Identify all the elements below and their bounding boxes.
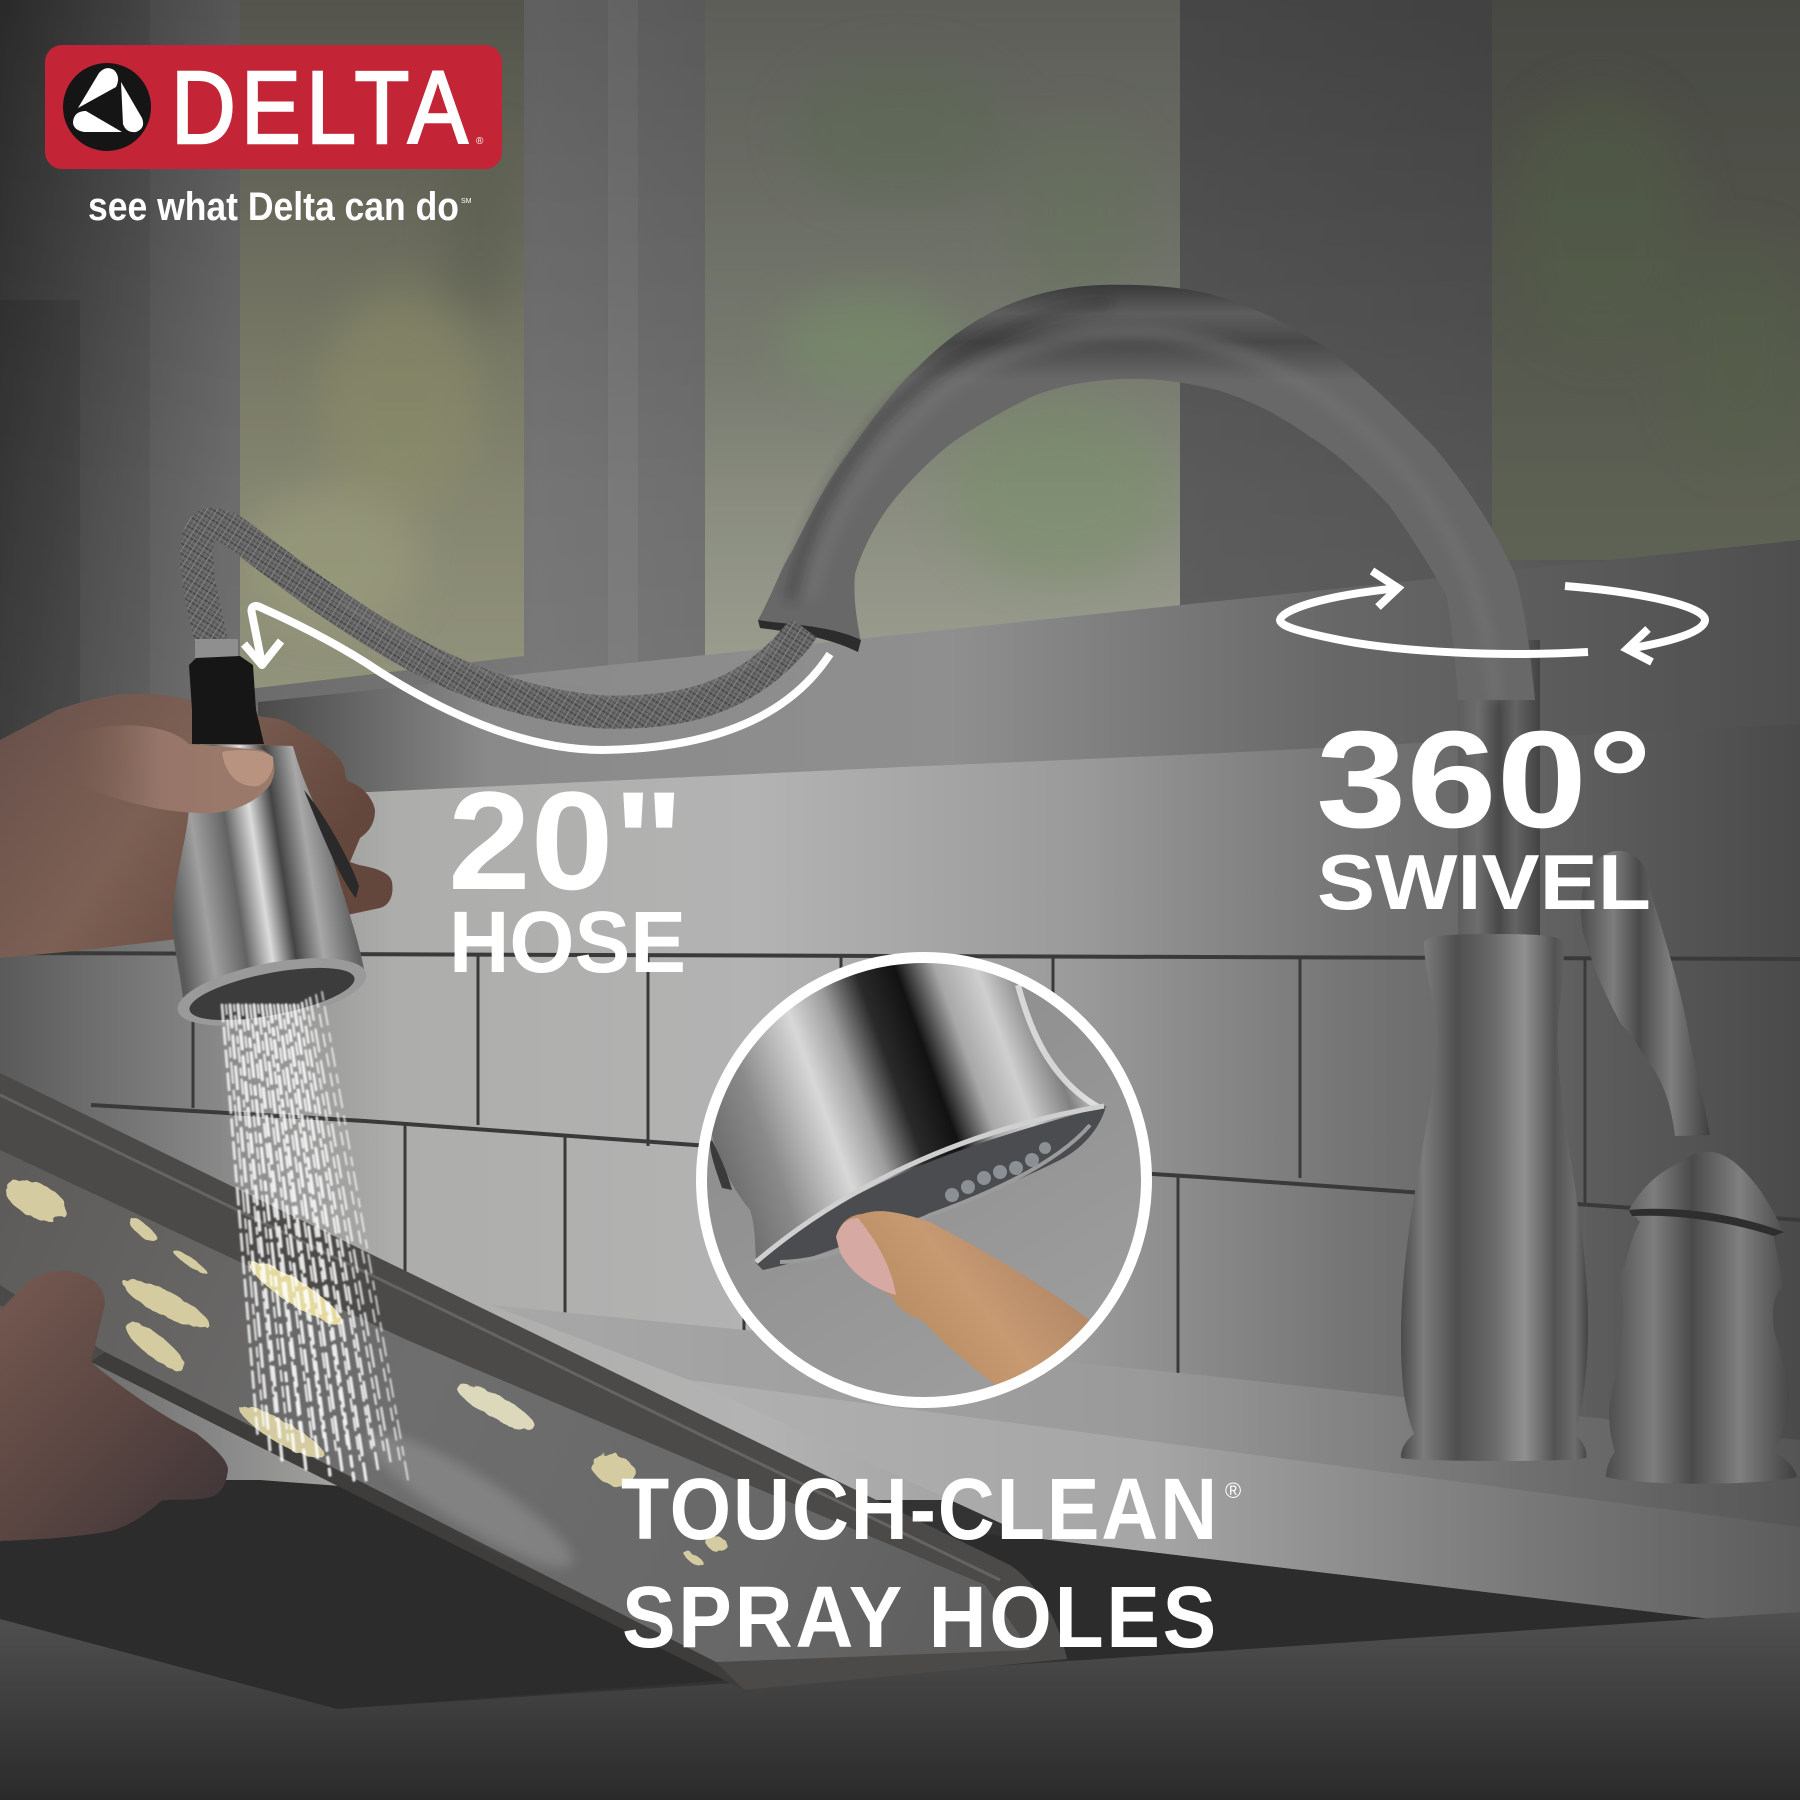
nozzle rim <box>172 945 372 1039</box>
pull-down hose <box>197 524 804 712</box>
countertop <box>491 1305 1800 1620</box>
tagline: see what Delta can do <box>88 185 459 229</box>
wet spray patch on tray <box>354 1414 586 1586</box>
touch-clean spray holes label <box>621 1461 1241 1666</box>
registered mark: ® <box>1225 1478 1241 1503</box>
circle outline <box>702 958 1146 1402</box>
lower hand holding tray <box>0 1270 228 1541</box>
arrow: hose length <box>244 606 830 750</box>
red badge <box>45 45 502 169</box>
chrome rim <box>756 1106 1104 1262</box>
upper wall and window frame <box>0 0 1800 800</box>
tray side wall highlight <box>0 1095 1000 1580</box>
nozzle underside <box>756 1106 1106 1270</box>
baking tray <box>0 1073 1067 1690</box>
tray outer shell <box>0 1073 1067 1690</box>
black neck <box>189 656 264 744</box>
window panes with foliage <box>240 0 1800 700</box>
tray flat base <box>0 1150 1030 1662</box>
20 inch hose label: HOSE <box>449 894 686 991</box>
chrome collar <box>195 639 238 659</box>
lower wall <box>0 724 1800 1500</box>
sprayer body <box>172 744 365 1006</box>
20 inch hose label <box>448 762 686 991</box>
thumb <box>70 725 274 813</box>
handle cap and base <box>1606 1152 1797 1484</box>
tagline: SM <box>461 198 472 205</box>
360 swivel label <box>1316 703 1652 926</box>
20 inch hose label: 20" <box>448 762 684 919</box>
fingernail <box>836 1218 896 1295</box>
tile wall grout lines <box>0 953 1800 1395</box>
faucet base body <box>1401 934 1588 1461</box>
registered mark: ® <box>476 136 484 147</box>
chrome highlight <box>1018 985 1100 1108</box>
handle lever <box>1581 851 1710 1136</box>
faucet handle <box>1581 851 1797 1484</box>
body dark button <box>710 1140 732 1190</box>
window sill <box>258 540 1800 792</box>
spray holes <box>945 1142 1051 1202</box>
sprayer head close-up <box>712 963 1106 1270</box>
tray lower lip <box>91 1352 744 1690</box>
pull-down sprayer head <box>172 639 372 1039</box>
360 swivel label: SWIVEL <box>1317 838 1651 926</box>
touch-clean spray holes label: TOUCH-CLEAN <box>621 1461 1219 1558</box>
upper hand holding sprayer <box>0 694 392 958</box>
top vignette <box>0 0 1800 500</box>
food residue <box>0 1171 731 1568</box>
Delta logo <box>45 45 502 169</box>
thumb nail <box>222 750 273 786</box>
inset circle: touch-clean close-up <box>660 920 1146 1402</box>
wordmark: DELTA <box>171 50 473 165</box>
360 swivel label: 360° <box>1316 703 1652 857</box>
touch-clean spray holes label: SPRAY HOLES <box>622 1569 1219 1666</box>
sink basin <box>0 1480 1800 1709</box>
fingertip <box>836 1211 1092 1385</box>
trigger <box>304 790 359 898</box>
black emblem with white tri-drop icon <box>63 63 151 151</box>
arrow: 360 swivel <box>1280 571 1705 662</box>
spray face <box>186 957 358 1031</box>
faucet spout <box>758 285 1540 945</box>
sink front rim <box>0 1612 1800 1800</box>
water spray <box>222 992 408 1480</box>
